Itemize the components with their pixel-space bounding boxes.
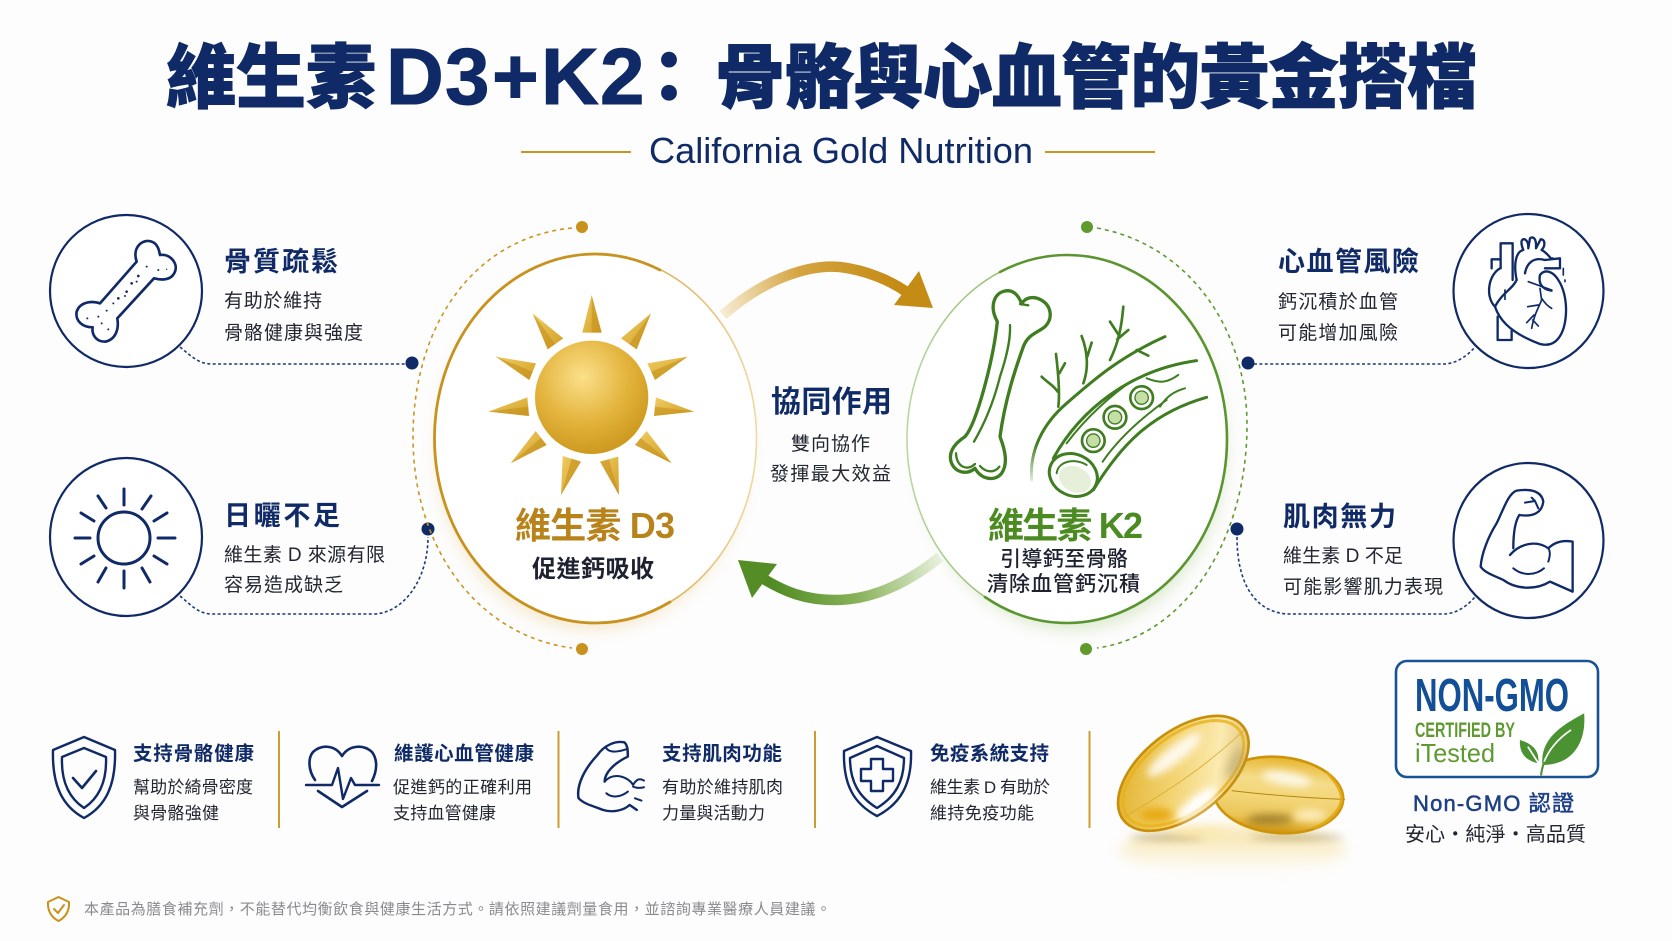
dashed orbit (413, 221, 588, 655)
description: 骨骼健康與強度 (224, 322, 363, 344)
badge: Non-GMO: CERTIFIED BY (1415, 719, 1515, 742)
label: 維生素 D3 (515, 505, 675, 546)
dashed orbit (1080, 221, 1247, 655)
connector (180, 522, 434, 614)
panel: vitamin K2 (907, 221, 1247, 655)
connector (1242, 347, 1475, 370)
synergy text: 雙向協作 (791, 433, 870, 455)
benefit: bone health: 支持骨骼健康 (133, 742, 254, 765)
badge: Non-GMO (1396, 661, 1598, 777)
capsule: back (1210, 751, 1346, 839)
benefit: muscle function: 力量與活動力 (662, 804, 765, 823)
arrow: K2 to D3 (738, 557, 940, 600)
badge: Non-GMO: iTested (1415, 738, 1495, 768)
icon: bone (50, 215, 202, 367)
benefit: muscle function (578, 742, 783, 823)
heading: 心血管風險 (1278, 246, 1419, 277)
title: 骨骼與心血管的黃金搭檔 (715, 39, 1477, 117)
connector (1230, 522, 1475, 614)
subtitle: brand: California Gold Nutrition (649, 130, 1033, 171)
description: 引導鈣至骨骼 (1000, 548, 1128, 571)
capsule: front (1097, 693, 1269, 853)
label: 維生素 K2 (988, 505, 1143, 546)
benefit: bone health: 與骨骼強健 (133, 804, 219, 823)
badge: Non-GMO: NON-GMO (1415, 669, 1569, 721)
benefit: cardiovascular health (306, 742, 534, 823)
connector (180, 347, 418, 370)
icon: arm (578, 742, 644, 811)
K2 circle (907, 255, 1227, 623)
description: 容易造成缺乏 (224, 574, 343, 596)
icon: shield check (53, 737, 115, 818)
description: 可能影響肌力表現 (1283, 576, 1443, 598)
icon: sun outline (50, 458, 202, 616)
benefit: muscle function: 有助於維持肌肉 (662, 778, 783, 797)
icon: sun (488, 295, 694, 495)
benefit: immune support: 維持免疫功能 (930, 804, 1034, 823)
arrow: D3 to K2 (723, 267, 933, 315)
synergy text: 協同作用 (771, 386, 892, 419)
icon: heartbeat (306, 747, 379, 807)
icon: vessel with deposits (1042, 361, 1207, 504)
heading: 日曬不足 (224, 501, 340, 531)
description: 維生素 D 來源有限 (224, 544, 385, 566)
title: ： (634, 39, 704, 117)
divider (278, 731, 280, 828)
benefit: cardiovascular health: 促進鈣的正確利用 (393, 778, 532, 797)
icon: green bone (950, 291, 1050, 479)
icon: heart (1454, 214, 1604, 368)
panel: cardiovascular risk (1242, 214, 1604, 370)
disclaimer: 本產品為膳食補充劑，不能替代均衡飲食與健康生活方式。請依照建議劑量食用，並諮詢專業醫療人員建議。 (84, 900, 831, 918)
divider (558, 731, 560, 828)
icon: bone and blood vessel (950, 291, 1207, 504)
panel: osteoporosis risk (50, 215, 418, 370)
panel: muscle weakness (1230, 463, 1604, 618)
benefit: bone health: 幫助於綺骨密度 (133, 778, 253, 797)
certification label: Non-GMO 認證 (1413, 791, 1574, 816)
benefits row (53, 731, 1090, 828)
capsule reflection (1120, 827, 1347, 873)
benefit: muscle function: 支持肌肉功能 (662, 743, 782, 765)
benefit: bone health (53, 737, 254, 823)
panel: Non-GMO certification (1396, 661, 1598, 846)
icon: small shield (48, 897, 69, 921)
certification tagline: 安心・純淨・高品質 (1405, 823, 1586, 846)
icon: leaves (1520, 713, 1584, 775)
divider (1088, 731, 1090, 828)
description: 鈣沉積於血管 (1278, 291, 1398, 313)
benefit: cardiovascular health: 維護心血管健康 (394, 742, 534, 765)
title: 維生素 (166, 39, 376, 117)
benefit: immune support: 維生素 D 有助於 (930, 778, 1050, 797)
panel: vitamin D3 (413, 221, 756, 655)
description: 可能增加風險 (1278, 322, 1398, 344)
panel: lack of sunlight (50, 458, 434, 616)
benefit: immune support (844, 737, 1050, 823)
synergy text (770, 386, 892, 485)
description: 清除血管鈣沉積 (987, 573, 1140, 596)
icon: artery branches (1031, 307, 1165, 480)
divider (814, 731, 816, 828)
synergy text: 發揮最大效益 (770, 463, 891, 485)
title: D3+K2 (386, 32, 644, 121)
softgel capsules (1097, 693, 1347, 873)
heading: 骨質疏鬆 (224, 247, 338, 277)
icon: flexed arm (1454, 463, 1604, 618)
heading: 肌肉無力 (1283, 502, 1396, 532)
benefit: cardiovascular health: 支持血管健康 (393, 804, 496, 823)
disclaimer (48, 897, 831, 921)
icon: shield plus (844, 737, 911, 816)
description: 促進鈣吸收 (532, 556, 654, 583)
description: 有助於維持 (224, 290, 322, 312)
D3 circle (434, 254, 756, 623)
benefit: immune support: 免疫系統支持 (930, 742, 1049, 765)
description: 維生素 D 不足 (1283, 545, 1403, 567)
